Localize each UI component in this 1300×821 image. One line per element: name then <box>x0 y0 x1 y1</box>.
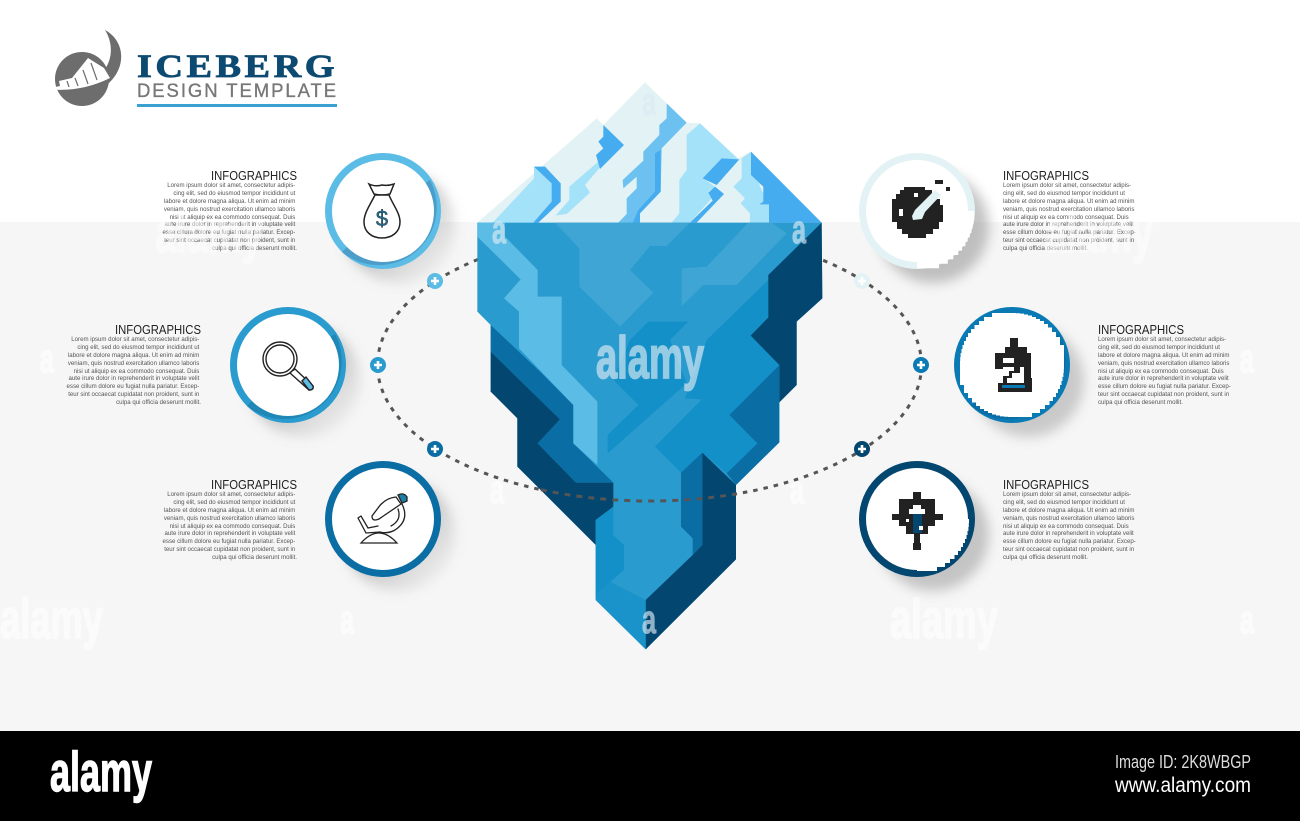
background watermarks: a <box>40 337 54 381</box>
heading: INFOGRAPHICS <box>1003 477 1089 492</box>
heading: INFOGRAPHICS <box>211 477 297 492</box>
body: esse cillum dolore eu fugiat nulla pariatur. Excep- <box>1003 229 1136 236</box>
body: culpa qui officia deserunt mollit. <box>212 554 297 561</box>
body: cing elit, sed do eiusmod tempor incididunt ut <box>173 499 296 506</box>
body: cing elit, sed do eiusmod tempor incididunt ut <box>77 344 200 351</box>
body: nisi ut aliquip ex ea commodo consequat. Duis <box>74 368 199 375</box>
body: cing elit, sed do eiusmod tempor incididunt ut <box>1098 344 1220 351</box>
plus node: lower right <box>854 441 870 457</box>
iceberg watermark: a <box>792 208 806 252</box>
body: veniam, quis nostrud exercitation ullamco laboris <box>1098 360 1229 367</box>
body: Lorem ipsum dolor sit amet, consectetur adipis- <box>167 182 295 189</box>
iceberg watermark: a <box>642 80 656 124</box>
body: Lorem ipsum dolor sit amet, consectetur adipis- <box>1003 491 1131 498</box>
body: nisi ut aliquip ex ea commodo consequat. Duis <box>170 523 295 530</box>
background watermarks <box>0 337 1254 650</box>
body: teur sint occaecat cupidatat non proident, sunt in <box>164 237 295 244</box>
icon: magnifier <box>263 342 313 390</box>
background watermarks: a <box>490 468 504 512</box>
body: labore et dolore magna aliqua. Ut enim ad minim <box>1003 507 1134 514</box>
background watermarks: alamy <box>890 587 998 650</box>
footer url: www.alamy.com <box>1114 774 1251 797</box>
body: cing elit, sed do eiusmod tempor incididunt ut <box>1003 190 1125 197</box>
panel: magnifier circle <box>230 307 360 437</box>
footer image id: Image ID: 2K8WBGP <box>1115 752 1251 772</box>
body: veniam, quis nostrud exercitation ullamco laboris <box>164 206 295 213</box>
body: esse cillum dolore eu fugiat nulla pariatur. Excep- <box>163 229 295 236</box>
body: teur sint occaecat cupidatat non proident, sunt in <box>164 546 295 553</box>
panel: chess knight circle <box>954 307 1084 437</box>
icon: money bag: $ <box>376 206 388 231</box>
logo emblem <box>46 30 121 106</box>
body: nisi ut aliquip ex ea commodo consequat. Duis <box>1003 214 1129 221</box>
background watermarks: a <box>790 468 804 512</box>
plus node: upper right <box>854 273 870 289</box>
body: nisi ut aliquip ex ea commodo consequat. Duis <box>1098 368 1224 375</box>
text block: top right <box>1003 168 1137 252</box>
body: teur sint occaecat cupidatat non proident, sunt in <box>1003 546 1134 553</box>
plus node: middle right <box>913 357 929 373</box>
body: esse cillum dolore eu fugiat nulla pariatur. Excep- <box>1098 383 1231 390</box>
body: teur sint occaecat cupidatat non proident, sunt in <box>1003 237 1134 244</box>
icon: pixel bulb gear <box>892 492 943 550</box>
body: labore et dolore magna aliqua. Ut enim ad minim <box>164 507 295 514</box>
body: labore et dolore magna aliqua. Ut enim ad minim <box>1003 198 1134 205</box>
iceberg watermark: a <box>492 208 506 252</box>
body: teur sint occaecat cupidatat non proident, sunt in <box>68 391 199 398</box>
heading: INFOGRAPHICS <box>115 322 201 337</box>
text block: bottom left <box>163 477 297 561</box>
text block: bottom right <box>1003 477 1137 561</box>
body: nisi ut aliquip ex ea commodo consequat. Duis <box>170 214 295 221</box>
text watermark overlays: alamy <box>155 201 263 264</box>
plus node: upper left <box>427 273 443 289</box>
dotted orbit front arc <box>541 490 736 501</box>
body: nisi ut aliquip ex ea commodo consequat. Duis <box>1003 523 1129 530</box>
logo subtitle: DESIGN TEMPLATE <box>137 81 338 102</box>
body: aute irure dolor in reprehenderit in voluptate velit <box>69 375 200 382</box>
text block: middle right <box>1098 322 1232 406</box>
body: culpa qui officia deserunt mollit. <box>1003 554 1088 561</box>
body: labore et dolore magna aliqua. Ut enim ad minim <box>1098 352 1229 359</box>
footer bar <box>0 731 1300 821</box>
body: Lorem ipsum dolor sit amet, consectetur adipis- <box>1003 182 1131 189</box>
body: veniam, quis nostrud exercitation ullamco laboris <box>1003 206 1134 213</box>
body: culpa qui officia deserunt mollit. <box>1098 399 1183 406</box>
body: culpa qui officia deserunt mollit. <box>116 399 201 406</box>
icon: pixel target <box>892 180 950 238</box>
background watermarks: a <box>1240 337 1254 381</box>
text watermark overlays <box>155 201 1153 264</box>
body: labore et dolore magna aliqua. Ut enim ad minim <box>68 352 199 359</box>
heading: INFOGRAPHICS <box>1098 322 1184 337</box>
dotted orbit behind iceberg <box>378 229 922 501</box>
heading: INFOGRAPHICS <box>1003 168 1089 183</box>
iceberg <box>477 82 822 649</box>
body: aute irure dolor in reprehenderit in voluptate velit <box>165 221 296 228</box>
logo title: ICEBERG <box>137 49 338 85</box>
iceberg watermark: alamy <box>596 325 704 391</box>
body: culpa qui officia deserunt mollit. <box>212 245 297 252</box>
plus node: lower left <box>427 441 443 457</box>
body: cing elit, sed do eiusmod tempor incididunt ut <box>173 190 296 197</box>
panel: microscope circle <box>325 461 455 591</box>
body: Lorem ipsum dolor sit amet, consectetur adipis- <box>1098 336 1226 343</box>
body: cing elit, sed do eiusmod tempor incididunt ut <box>1003 499 1125 506</box>
logo underline <box>137 104 337 107</box>
heading: INFOGRAPHICS <box>211 168 297 183</box>
body: Lorem ipsum dolor sit amet, consectetur adipis- <box>167 491 295 498</box>
background watermarks: a <box>340 598 354 642</box>
background watermarks: alamy <box>0 587 103 650</box>
body: aute irure dolor in reprehenderit in voluptate velit <box>1003 221 1134 228</box>
icon: pixel chess knight <box>995 338 1032 392</box>
iceberg tip above water <box>477 82 822 223</box>
panel: target circle <box>859 153 989 283</box>
body: esse cillum dolore eu fugiat nulla pariatur. Excep- <box>1003 538 1136 545</box>
iceberg watermark: a <box>642 598 656 642</box>
body: aute irure dolor in reprehenderit in voluptate velit <box>1003 530 1134 537</box>
body: veniam, quis nostrud exercitation ullamco laboris <box>164 515 295 522</box>
body: veniam, quis nostrud exercitation ullamco laboris <box>68 360 199 367</box>
text block: middle left <box>67 322 201 406</box>
icon: microscope <box>358 494 407 543</box>
footer logo: alamy <box>50 740 152 803</box>
body: veniam, quis nostrud exercitation ullamco laboris <box>1003 515 1134 522</box>
body: teur sint occaecat cupidatat non proident, sunt in <box>1098 391 1229 398</box>
iceberg watermark <box>492 80 806 642</box>
body: Lorem ipsum dolor sit amet, consectetur adipis- <box>71 336 199 343</box>
body: esse cillum dolore eu fugiat nulla pariatur. Excep- <box>163 538 295 545</box>
body: esse cillum dolore eu fugiat nulla pariatur. Excep- <box>67 383 199 390</box>
background watermarks: a <box>1240 598 1254 642</box>
panel: lightbulb gear circle <box>859 461 989 591</box>
iceberg underwater body <box>477 223 822 649</box>
plus node: middle left <box>370 357 386 373</box>
body: labore et dolore magna aliqua. Ut enim ad minim <box>164 198 295 205</box>
text block: top left <box>163 168 297 252</box>
body: culpa qui officia deserunt mollit. <box>1003 245 1088 252</box>
body: aute irure dolor in reprehenderit in voluptate velit <box>1098 375 1229 382</box>
logo <box>46 30 338 107</box>
body: aute irure dolor in reprehenderit in voluptate velit <box>165 530 296 537</box>
text watermark overlays: alamy <box>1045 201 1153 264</box>
panel: money circle <box>325 153 455 283</box>
